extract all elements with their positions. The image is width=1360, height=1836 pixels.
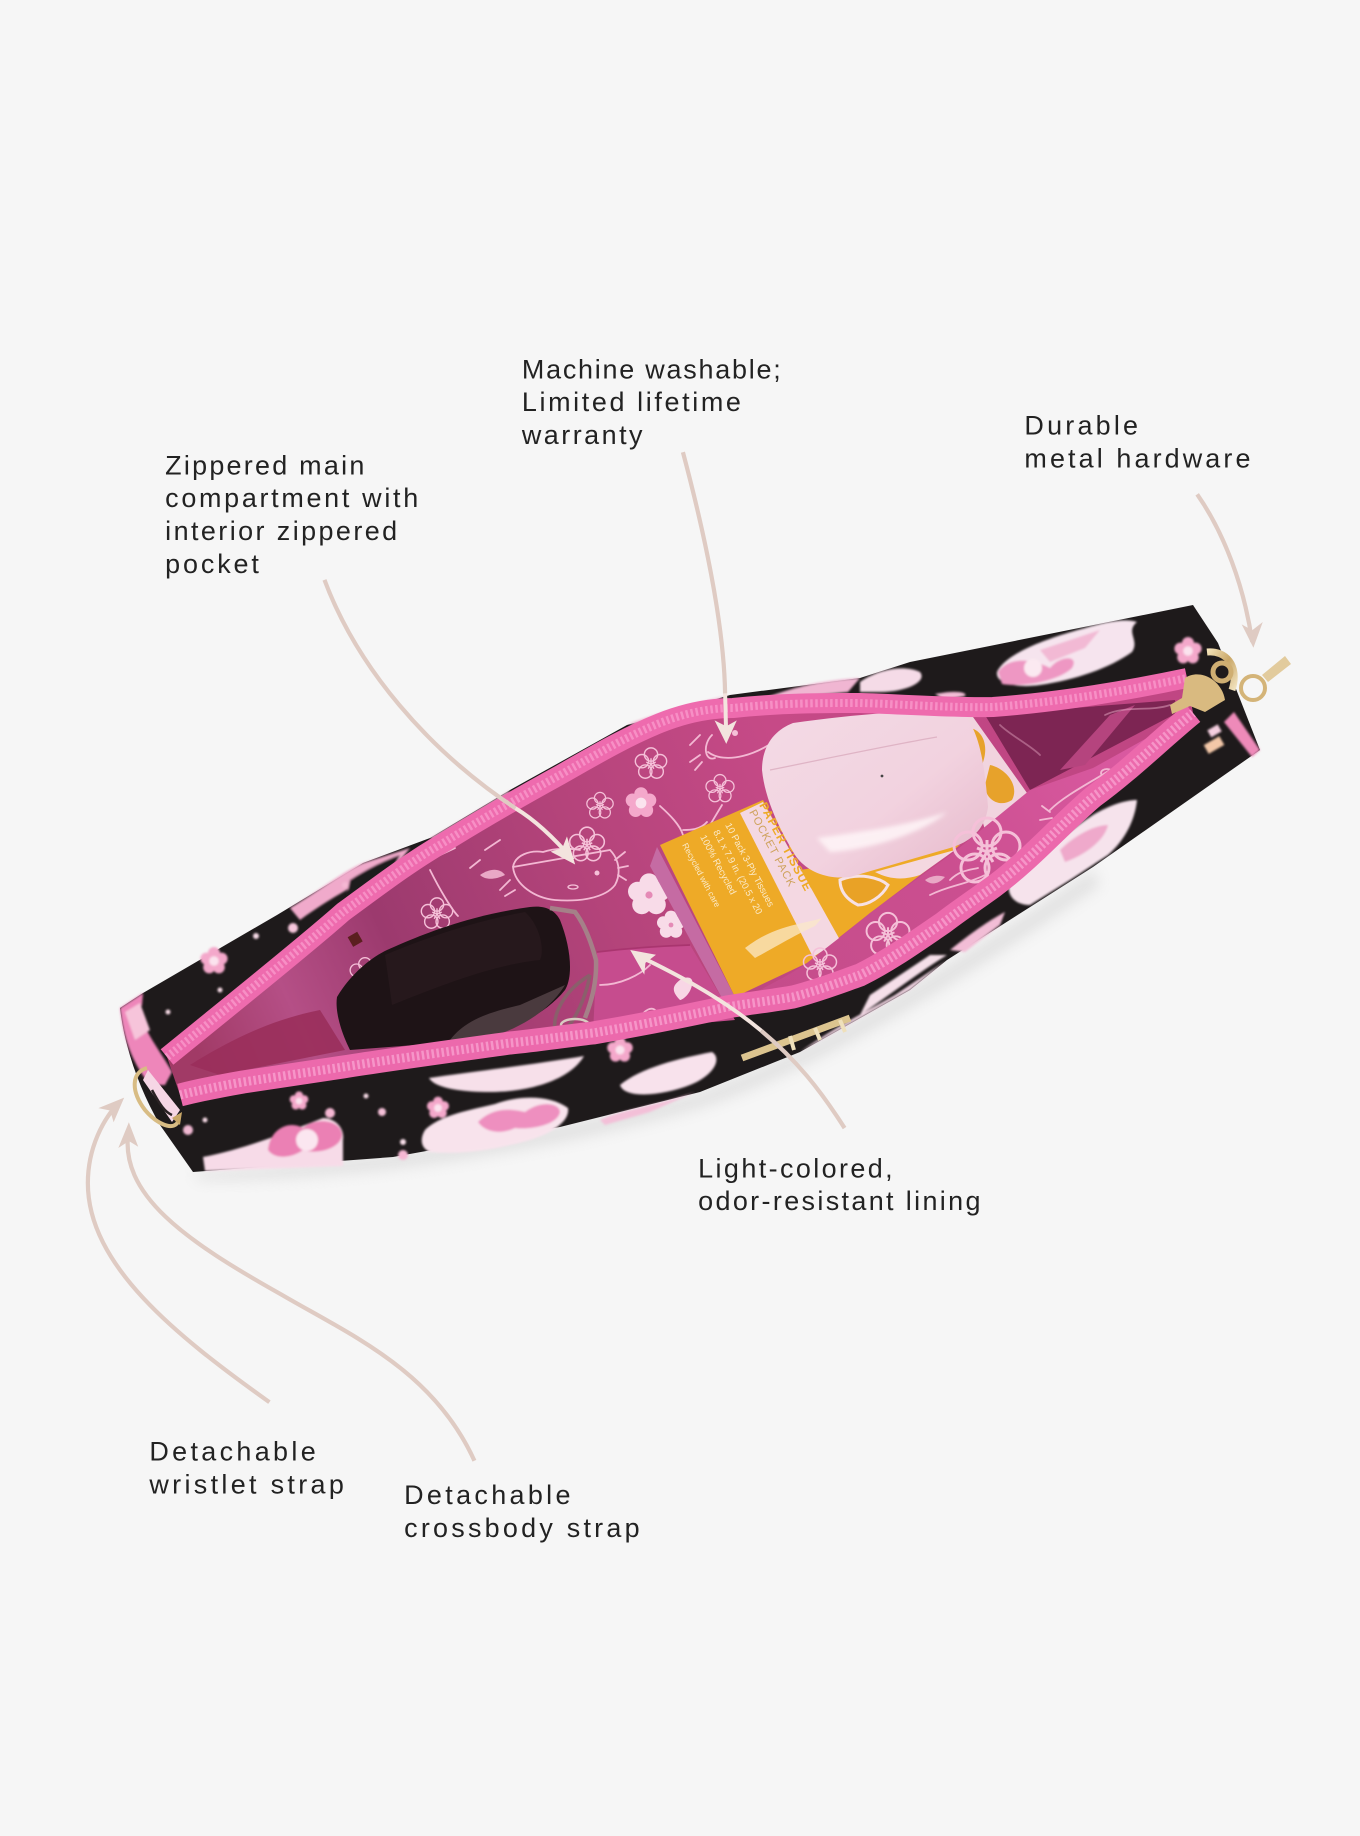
pouch shadow [193, 870, 1100, 1180]
upper kitty [706, 735, 782, 759]
label: wristlet strap: wristlet strap [148, 1470, 344, 1500]
lower fabric print [183, 712, 1260, 1171]
interior lining [167, 678, 1193, 1095]
tissue pack text: POCKET PACK [746, 808, 797, 889]
label: zippered compartment [165, 450, 418, 579]
zipper puller hardware [1170, 652, 1291, 714]
label: crossbody strap [404, 1480, 640, 1543]
label: machine washable: warranty [521, 420, 643, 450]
right end strip [1224, 712, 1260, 757]
cat one [203, 1118, 343, 1171]
pouch product photo [120, 605, 1291, 1180]
label: metal hardware [1024, 411, 1250, 473]
interior pocket seam [593, 945, 735, 1033]
earbuds case [762, 711, 988, 878]
lower right pale blobs [800, 960, 947, 1052]
tissue pack [650, 712, 1027, 1000]
tissue pack text [680, 800, 815, 916]
tissue pack back panel [950, 712, 1027, 830]
tissue pack text: 8.1 x 7.9 in. (20.5 x 20 [710, 828, 764, 916]
front lining flap [727, 712, 1193, 1007]
label: machine washable [521, 354, 781, 450]
label: machine washable: Machine washable; [522, 354, 781, 384]
upper fabric print [120, 620, 1202, 1085]
label: wristlet strap [148, 1437, 344, 1500]
cat two [422, 1098, 568, 1153]
arrow: crossbody strap [118, 1122, 474, 1461]
arrow: metal hardware [1197, 494, 1263, 648]
arrow: wristlet strap [88, 1098, 269, 1402]
tissue pack text: PAPER TISSUE [756, 800, 815, 894]
kitty lining outline [513, 849, 619, 900]
blob beside upper right [860, 668, 922, 692]
arrow: zippered compartment [324, 580, 575, 864]
cat three top [429, 1056, 584, 1092]
tissue pack text: Recycled with care [680, 841, 723, 909]
flap print [804, 769, 1113, 980]
lining print [348, 730, 782, 986]
left end strip [120, 993, 172, 1085]
strap ring hardware [135, 1068, 182, 1126]
label: metal hardware: Durable [1024, 411, 1138, 441]
label: zippered compartment: pocket [165, 549, 259, 579]
blob mid [620, 1052, 716, 1094]
lower zipper tape [180, 713, 1193, 1095]
upper zipper tape [167, 678, 1187, 1057]
dark rose lining, left end [190, 1010, 345, 1075]
dark rear lining at right [985, 700, 1177, 790]
arrow: machine washable [683, 452, 737, 744]
label: crossbody strap: Detachable [404, 1480, 570, 1510]
label: machine washable: Limited lifetime [522, 387, 741, 417]
label: lining: odor-resistant lining [698, 1186, 980, 1216]
pouch outer fabric [120, 605, 1260, 1172]
car key fob [337, 907, 596, 1050]
label: wristlet strap: Detachable [149, 1437, 316, 1467]
tissue pack front [660, 800, 960, 997]
label: metal hardware: metal hardware [1024, 443, 1250, 473]
tissue pack text: 100% Recycled [697, 833, 738, 897]
label: zippered compartment: Zippered main [165, 450, 364, 480]
label: crossbody strap: crossbody strap [404, 1513, 640, 1543]
label: lining [698, 1153, 980, 1216]
clasp hardware [742, 1018, 850, 1058]
big cat blob upper right [997, 620, 1137, 686]
left upper blobs [430, 790, 510, 843]
label: lining: Light-colored, [698, 1153, 893, 1183]
filled flowers and stems [626, 787, 656, 817]
label: zippered compartment: interior zippered [165, 516, 397, 546]
tissue pack side [650, 847, 735, 1000]
label: zippered compartment: compartment with [165, 483, 418, 513]
arrow: lining [630, 950, 845, 1128]
tissue pack band [740, 802, 840, 957]
tissue pack text: 10 Pack 3-Ply Tissues [722, 821, 776, 909]
